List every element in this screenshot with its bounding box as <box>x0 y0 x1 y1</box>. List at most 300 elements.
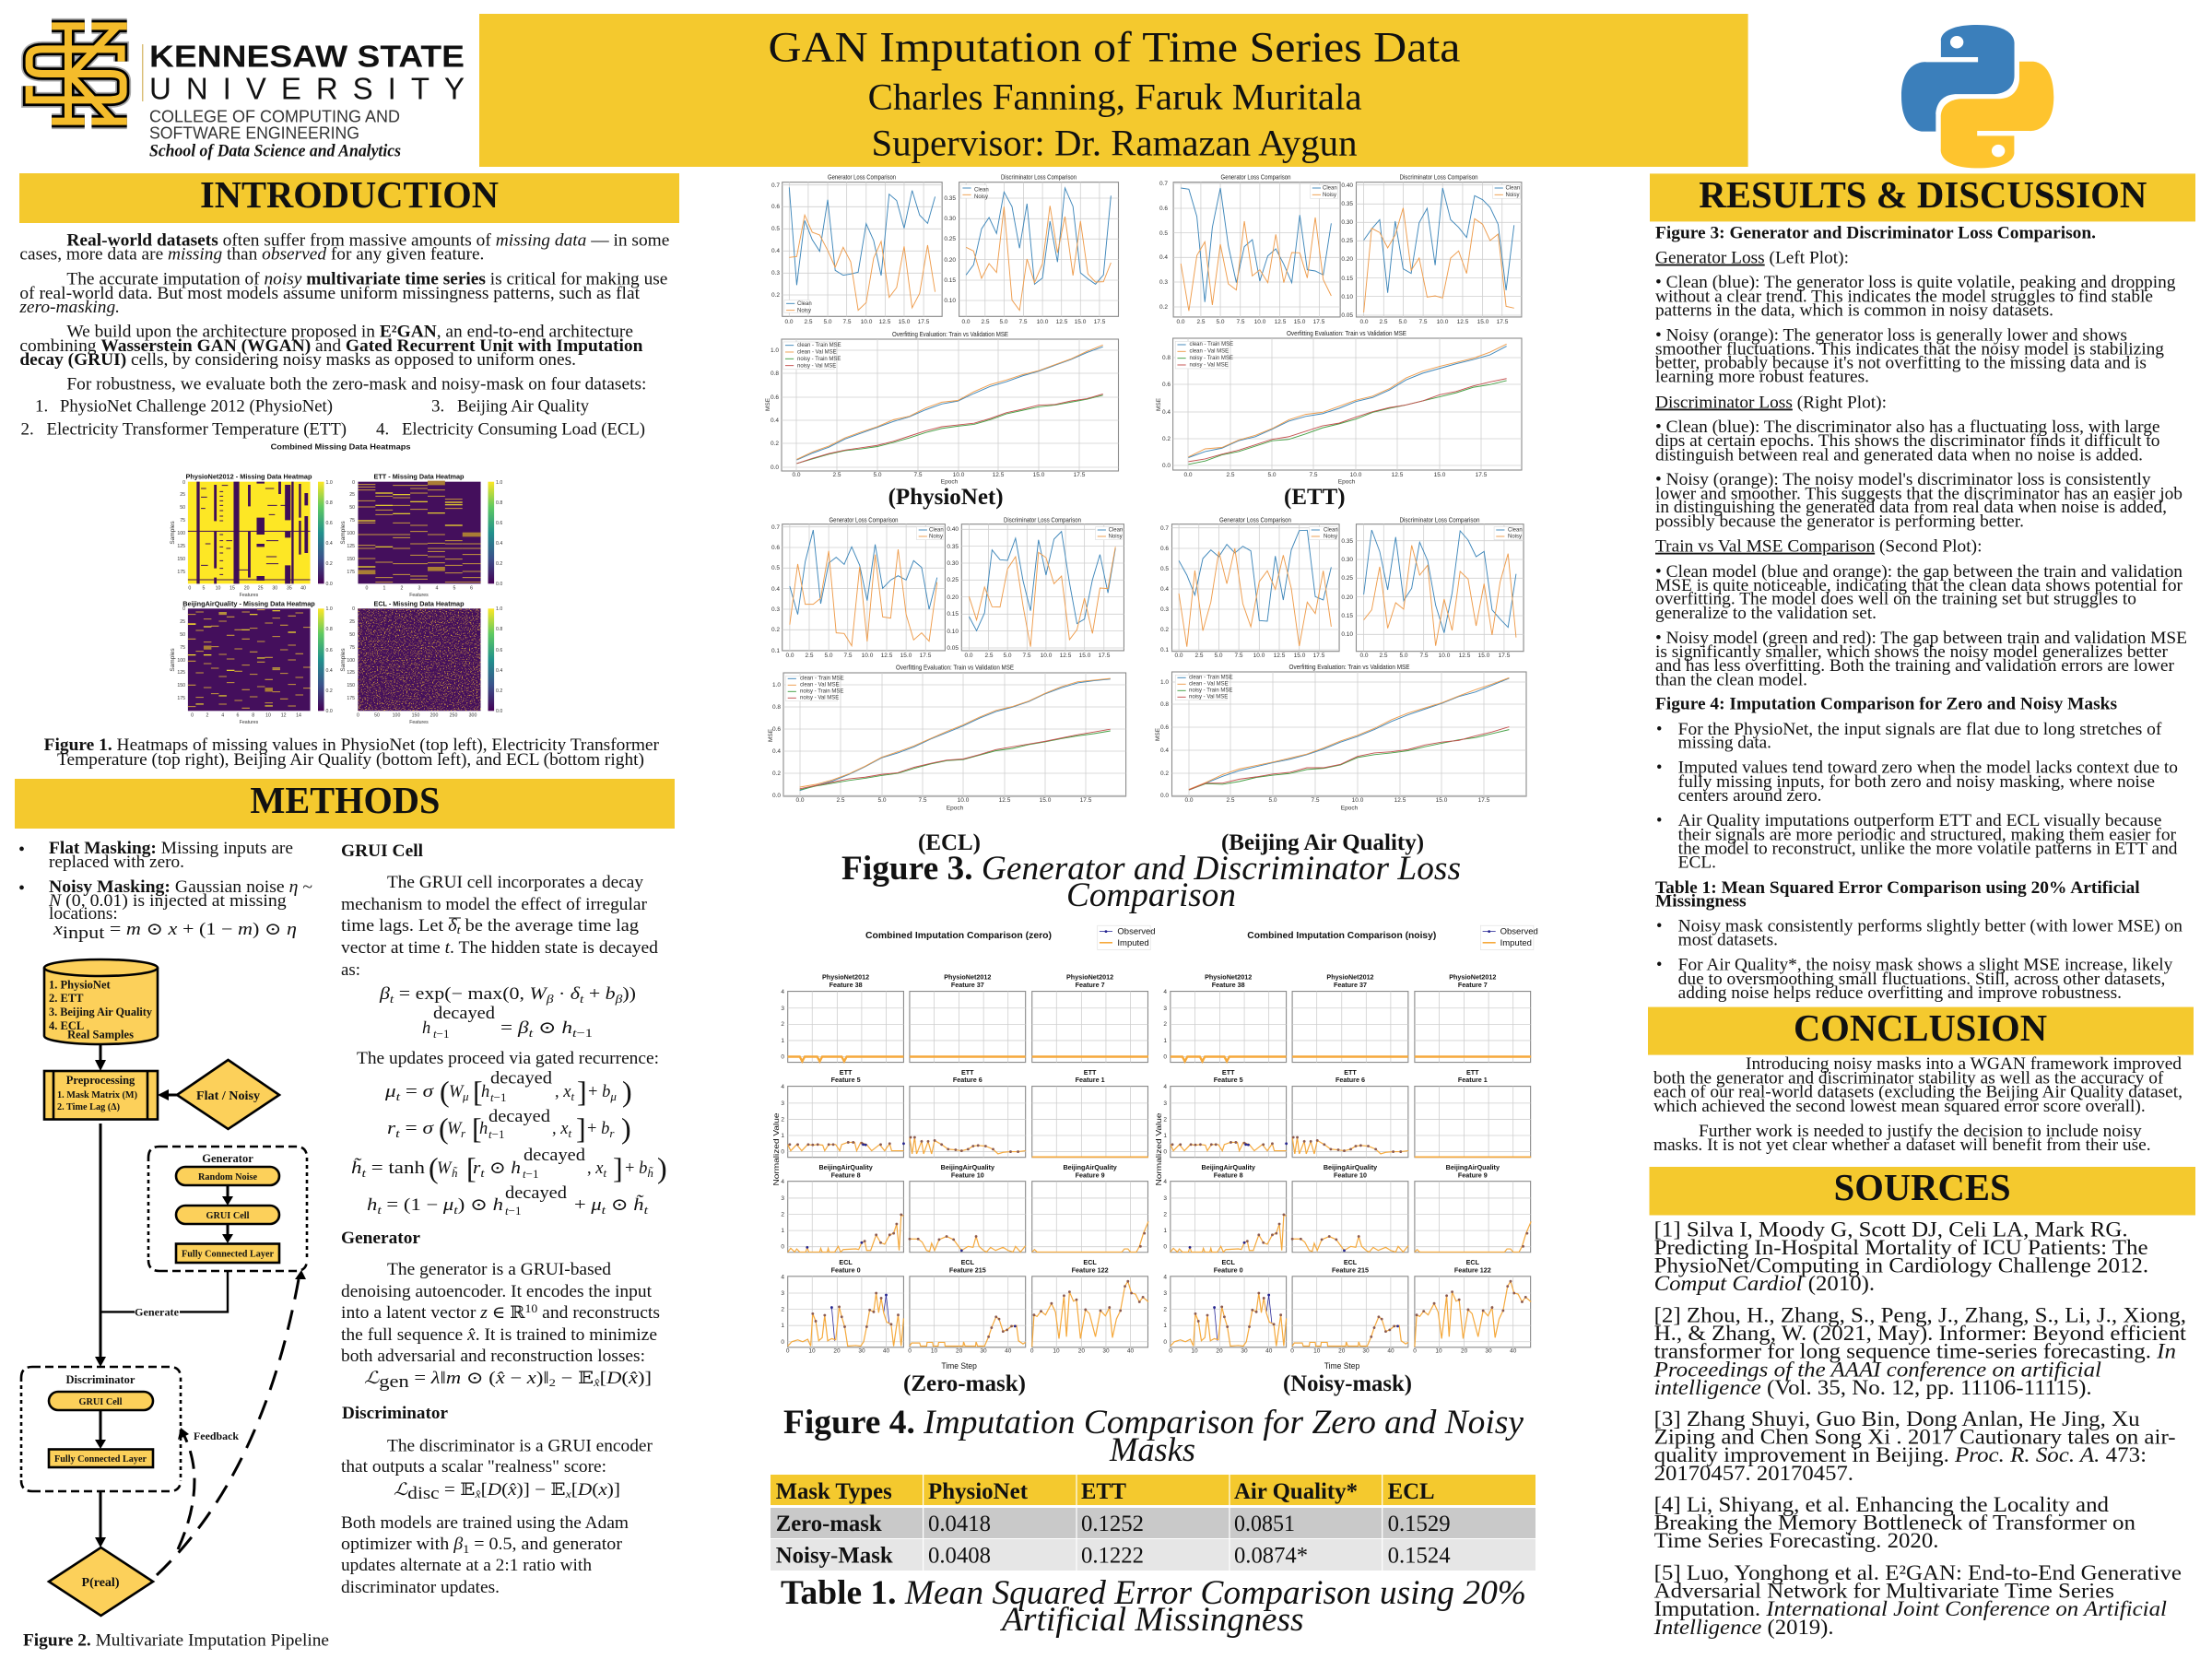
chart: Beijing discriminator loss: Discriminator Loss Comparison <box>1399 516 1480 524</box>
equation: update gate: decayed <box>490 1069 553 1088</box>
labels: noisy mask panel titles: ETT <box>1222 1068 1235 1077</box>
panel: discriminator: Fully Connected Layer <box>54 1453 147 1465</box>
chart: ETT overfitting evaluation: noisy - Train MSE <box>1189 356 1233 361</box>
labels: noisy mask panel titles: PhysioNet2012 <box>1326 973 1374 982</box>
text block: GRUI description: time lags. Let δ <box>341 917 456 935</box>
chart: PhysioNet overfitting evaluation: 1.0 <box>771 347 779 354</box>
chart: ECL overfitting evaluation: MSE <box>768 728 774 742</box>
equation: hidden state: t <box>644 1203 648 1217</box>
labels: heatmap axes and titles: 3 <box>418 585 421 591</box>
equation: hidden state: h <box>493 1196 503 1215</box>
chart: ECL overfitting evaluation: 0.0 <box>772 793 781 799</box>
chart: imputation comparison zero mask: 1 <box>781 1038 784 1044</box>
chart: ECL generator loss: 0.6 <box>771 545 780 551</box>
legend: colorbars: 1.0 <box>326 606 333 612</box>
chart: Beijing generator loss: Noisy <box>1324 534 1337 539</box>
chart: ECL generator loss: 0.7 <box>771 524 780 531</box>
chart: imputation comparison noisy mask: 4 <box>1163 1179 1167 1185</box>
text block: figure 4 discussion: Imputed values tend toward zero when the model lacks context due to <box>1678 759 2178 778</box>
chart: Beijing discriminator loss: 0.35 <box>1341 538 1353 545</box>
title banner: GAN Imputation of Time Series Data <box>769 24 1461 72</box>
equation: candidate state: h̃ <box>452 1166 458 1180</box>
chart: PhysioNet discriminator loss: 0.0 <box>961 319 971 325</box>
labels: heatmap axes and titles: 25 <box>180 492 185 498</box>
labels: heatmap axes and titles: 50 <box>349 632 355 638</box>
equation: candidate state: t <box>361 1166 366 1180</box>
text block: references: [2] Zhou, H., Zhang, S., Peng, J., Zhang, S., Li, J., Xiong, <box>1654 1304 2186 1328</box>
chart: PhysioNet discriminator loss: 0.15 <box>944 277 956 284</box>
chart: PhysioNet overfitting evaluation: 0.8 <box>771 371 779 377</box>
panel: generator: GRUI Cell <box>206 1210 249 1221</box>
equation: decay factor: = β <box>500 1019 526 1038</box>
label: ECL: (ECL) <box>918 830 981 855</box>
chart: Beijing generator loss: Generator Loss Comparison <box>1219 516 1291 524</box>
equation: discriminator loss: = 𝔼 <box>440 1481 475 1500</box>
chart: imputation comparison zero mask: 20 <box>956 1348 963 1355</box>
chart: ETT overfitting evaluation <box>1156 329 1522 485</box>
arrow: generate <box>101 1271 228 1318</box>
text block: masking strategies: Flat Masking: Missing inputs are <box>49 840 293 858</box>
text block: generator description: 10 <box>524 1301 537 1315</box>
equation: candidate state: ) <box>657 1151 667 1184</box>
chart group: ECL loss plots <box>768 516 1126 855</box>
chart: Beijing overfitting evaluation: 12.5 <box>1394 797 1406 804</box>
panel: GRUI cell text <box>341 842 667 1597</box>
chart: ECL generator loss: 2.5 <box>805 653 814 659</box>
heading: conclusion: CONCLUSION <box>1794 1006 2047 1049</box>
chart: imputation comparison noisy mask: 3 <box>1163 1006 1167 1012</box>
labels: zero mask panel titles: ETT <box>961 1068 974 1077</box>
text block: introduction paragraphs: 2. <box>20 420 34 440</box>
text block: generator description: the full sequence x̂. It is trained to minimize <box>341 1326 657 1345</box>
text block: references: Proceedings of the AAAI conference on artificial <box>1653 1359 2101 1382</box>
labels: heatmap axes and titles: 5 <box>453 585 456 591</box>
equation: reset gate: r <box>609 1126 615 1140</box>
labels: heatmap axes and titles: 15 <box>229 585 235 591</box>
chart: imputation comparison noisy mask: Time Step <box>1324 1361 1359 1371</box>
text block: references: Comput Cardiol (2010). <box>1654 1272 1875 1296</box>
chart: PhysioNet overfitting evaluation <box>765 330 1119 485</box>
logo: Kennesaw State University: KENNESAW STATE <box>149 40 465 74</box>
chart: PhysioNet overfitting evaluation: Epoch <box>941 479 959 485</box>
equation: candidate state: W <box>437 1159 453 1178</box>
chart: imputation comparison zero mask: 4 <box>781 1274 784 1281</box>
text block: table 1 discussion: Table 1: Mean Squared Error Comparison using 20% Artificial <box>1655 879 2140 898</box>
chart: Beijing overfitting evaluation: 5.0 <box>1268 797 1277 804</box>
node: real samples cylinder <box>44 959 158 1044</box>
labels: heatmap axes and titles: 4 <box>436 585 439 591</box>
caption: figure 3: Figure 3. Generator and Discriminator Loss <box>841 850 1461 888</box>
text block: training notes: discriminator updates. <box>341 1579 500 1597</box>
legend: colorbars: 0.0 <box>496 709 502 714</box>
equation: update gate: + b <box>588 1083 610 1101</box>
chart: Beijing overfitting evaluation: 0.4 <box>1160 747 1169 754</box>
legend: colorbars: 1.0 <box>496 480 502 486</box>
text block: references: intelligence (Vol. 35, No. 12, pp. 11106-11115). <box>1654 1376 2092 1400</box>
chart: imputation comparison zero mask: 3 <box>781 1100 784 1107</box>
chart: imputation comparison noisy mask: 1 <box>1163 1228 1167 1234</box>
chart: Beijing overfitting evaluation: 15.0 <box>1436 797 1448 804</box>
text block: GRUI description: t <box>457 923 461 936</box>
chart: imputation comparison noisy mask: 0 <box>1169 1348 1172 1355</box>
labels: heatmap axes and titles: 0 <box>352 480 355 486</box>
labels: noisy mask panel titles: Feature 10 <box>1334 1171 1367 1179</box>
chart: PhysioNet overfitting evaluation: 0.0 <box>792 472 801 478</box>
text block: introduction paragraphs: We build upon the architecture proposed in E²GAN, an end-to-end architecture <box>66 323 633 342</box>
arrow: discriminator to output <box>95 1491 106 1547</box>
panel: generator: Fully Connected Layer <box>182 1248 274 1259</box>
arrow: generate: Generate <box>135 1305 180 1318</box>
heading: introduction: INTRODUCTION <box>200 173 499 216</box>
table: mean squared error comparison: 0.0408 <box>928 1544 991 1569</box>
chart: ETT overfitting evaluation: 10.0 <box>1350 472 1362 478</box>
chart: PhysioNet discriminator loss: Discriminator Loss Comparison <box>1001 173 1077 182</box>
chart: imputation comparison zero mask: 0 <box>1030 1348 1034 1355</box>
chart: PhysioNet overfitting evaluation: 2.5 <box>832 472 841 478</box>
heading: generator: Generator <box>341 1230 420 1248</box>
chart: imputation comparison zero mask: 3 <box>781 1195 784 1202</box>
chart: ECL discriminator loss: 7.5 <box>1022 653 1031 659</box>
chart: PhysioNet overfitting evaluation: clean - Train MSE <box>797 343 841 348</box>
node: flat or noisy decision: Flat / Noisy <box>196 1088 260 1102</box>
chart: ETT overfitting evaluation: 7.5 <box>1309 472 1318 478</box>
chart: ETT generator loss: 0.4 <box>1159 254 1168 261</box>
equation: hidden state: + μ <box>574 1196 600 1215</box>
labels: heatmap axes and titles: 200 <box>430 712 438 718</box>
panel: conclusion <box>1648 1006 2194 1155</box>
chart: PhysioNet discriminator loss: 0.30 <box>944 216 956 222</box>
equation: update gate: = <box>400 1083 423 1101</box>
text block: figure 4 discussion: their signals are more periodic and structured, making them easier for <box>1678 826 2176 844</box>
chart: PhysioNet discriminator loss: 12.5 <box>1056 319 1068 325</box>
chart: imputation comparison zero mask: 20 <box>1078 1348 1085 1355</box>
table: mean squared error comparison: ECL <box>1388 1479 1435 1504</box>
equation: hidden state: μ <box>442 1196 453 1215</box>
chart: imputation comparison noisy mask: 0 <box>1163 1244 1167 1251</box>
legend: colorbars: 0.6 <box>326 521 333 526</box>
equation: discriminator loss: [ <box>481 1481 488 1500</box>
chart: ECL overfitting evaluation: noisy - Val MSE <box>800 696 839 701</box>
text block: introduction paragraphs: For robustness, we evaluate both the zero-mask and noisy-mask on four datasets: <box>66 375 646 394</box>
labels: zero mask panel titles: PhysioNet2012 <box>944 973 991 982</box>
chart: Beijing generator loss: 7.5 <box>1234 653 1243 659</box>
text block: figure 3 discussion: • Clean (blue): The discriminator also has a fluctuating loss, with large <box>1655 418 2160 437</box>
equation: decay factor: t <box>580 992 584 1006</box>
chart: imputation comparison noisy mask: 2 <box>1163 1021 1167 1028</box>
chart: ETT overfitting evaluation: 0.8 <box>1162 355 1171 361</box>
chart: imputation comparison zero mask: 10 <box>808 1348 816 1355</box>
equation: reset gate: t <box>395 1126 400 1140</box>
chart: PhysioNet discriminator loss: 0.20 <box>944 257 956 264</box>
text block: figure 3 discussion: learning more robust features. <box>1655 369 1869 387</box>
equation: reset gate: ) <box>621 1112 631 1145</box>
chart: ECL overfitting evaluation <box>768 664 1126 811</box>
equation: discriminator loss: ℒ <box>394 1481 408 1500</box>
labels: heatmap axes and titles: 100 <box>347 658 355 664</box>
chart: ECL discriminator loss: 0.05 <box>947 645 959 652</box>
chart: PhysioNet generator loss: 15.0 <box>899 319 911 325</box>
equation: candidate state: t <box>603 1166 606 1180</box>
chart: Beijing generator loss: 0.1 <box>1160 647 1169 653</box>
labels: heatmap axes and titles: Features <box>409 720 429 725</box>
text block: GRUI description: mechanism to model the effect of irregular <box>341 896 647 914</box>
text block: figure 3 discussion: dips at certain epochs. This shows the discriminator finds it difficult to <box>1655 432 2160 451</box>
chart: ETT overfitting evaluation: 5.0 <box>1267 472 1277 478</box>
text block: GRUI description: vector at time t. The hidden state is decayed <box>341 939 659 958</box>
chart: imputation comparison noisy mask: 40 <box>1265 1348 1273 1355</box>
chart: ECL discriminator loss: 17.5 <box>1099 653 1111 659</box>
labels: heatmap axes and titles: 4 <box>221 712 224 718</box>
equation: decay factor <box>379 985 636 1041</box>
equation: reset gate: decayed <box>488 1108 551 1126</box>
logo: Kennesaw State University: School of Data Science and Analytics <box>149 141 401 160</box>
equation: update gate: μ <box>384 1083 396 1101</box>
caption: table 1: Table 1. Mean Squared Error Comparison using 20% <box>781 1574 1526 1612</box>
chart: ECL generator loss: 5.0 <box>824 653 833 659</box>
legend: colorbars: 0.0 <box>326 709 333 714</box>
equation: generator loss: D(x̂)] <box>606 1370 649 1388</box>
chart: ECL generator loss: Noisy <box>929 534 943 539</box>
text block: GRUI description: be the average time lag <box>461 917 639 935</box>
icon: KS emblem <box>29 23 127 122</box>
labels: heatmap axes and titles: 10 <box>265 712 271 718</box>
labels: heatmap axes and titles: 75 <box>180 518 185 524</box>
chart: PhysioNet overfitting evaluation: noisy - Train MSE <box>797 357 841 362</box>
text block: figure 3 discussion: • Noisy (orange): The generator loss is generally lower and shows <box>1655 326 2127 345</box>
node: real samples cylinder: 1. PhysioNet <box>49 979 111 992</box>
labels: zero mask panel titles: ETT <box>1084 1068 1097 1077</box>
text block: introduction paragraphs: Electricity Transformer Temperature (ETT) <box>46 420 347 440</box>
labels: heatmap axes and titles: ECL - Missing Data Heatmap <box>374 599 465 607</box>
chart: Beijing generator loss: 0.4 <box>1160 586 1169 593</box>
chart: imputation comparison noisy mask: 4 <box>1163 989 1167 995</box>
text block: figure 4 discussion: For the PhysioNet, the input signals are flat due to long stretches of <box>1678 721 2162 739</box>
text block: references: Predicting In-Hospital Mortality of ICU Patients: The <box>1654 1236 2148 1260</box>
text block: figure 3 discussion: Discriminator Loss (Right Plot): <box>1655 394 1887 413</box>
equation: candidate state: h̃ <box>351 1158 362 1178</box>
chart: ECL overfitting evaluation: Overfitting Evaluation: Train vs Validation MSE <box>896 664 1014 671</box>
labels: heatmap axes and titles: 0 <box>366 585 369 591</box>
text block: training notes <box>341 1514 629 1597</box>
equation: hidden state: h <box>367 1196 377 1215</box>
labels: zero mask panel titles: Feature 215 <box>949 1265 986 1274</box>
labels: noisy mask panel titles <box>1202 973 1500 1274</box>
label: PhysioNet: (PhysioNet) <box>888 485 1004 510</box>
chart: ECL discriminator loss: 0.20 <box>947 594 959 601</box>
chart: PhysioNet generator loss: 0.3 <box>771 270 780 276</box>
text block: figure 3 discussion: generalize to the validation set. <box>1655 605 1877 623</box>
chart: ECL discriminator loss: 0.10 <box>947 629 959 635</box>
chart: ECL generator loss: 15.0 <box>900 653 912 659</box>
node: real samples cylinder: 3. Beijing Air Quality <box>49 1006 153 1018</box>
equation: generator loss: λ‖m ⊙ ( x̂ − x)‖ <box>431 1370 547 1388</box>
labels: heatmap axes and titles: 100 <box>393 712 400 718</box>
chart: PhysioNet discriminator loss: Clean <box>974 188 989 194</box>
chart: ETT overfitting evaluation: 15.0 <box>1434 472 1446 478</box>
equation: reset gate: h <box>479 1120 488 1138</box>
labels: heatmap axes and titles: PhysioNet2012 - Missing Data Heatmap <box>186 472 312 480</box>
table: mean squared error comparison: 0.1524 <box>1388 1544 1451 1569</box>
labels: heatmap axes and titles: Samples <box>170 648 176 672</box>
labels: heatmap axes and titles: 35 <box>287 585 292 591</box>
chart: PhysioNet overfitting evaluation: 12.5 <box>993 472 1005 478</box>
node: real samples cylinder: 2. ETT <box>49 992 84 1005</box>
chart: Beijing generator loss: 0.6 <box>1160 546 1169 552</box>
text block: references: Breaking the Memory Bottleneck of Transformer on <box>1654 1512 2136 1535</box>
chart: imputation comparison zero mask: Observed <box>1117 927 1156 937</box>
chart: Beijing discriminator loss: Clean <box>1508 527 1523 533</box>
equation: reset gate: W <box>447 1120 463 1138</box>
equation: reset gate: , x <box>552 1120 568 1138</box>
chart: ETT overfitting evaluation: Overfitting Evaluation: Train vs Validation MSE <box>1287 329 1406 337</box>
arrow: main flow to discriminator <box>95 1124 106 1367</box>
chart: ETT overfitting evaluation: MSE <box>1156 397 1162 411</box>
label: zero mask: (Zero-mask) <box>903 1371 1026 1396</box>
node: real samples cylinder: Real Samples <box>67 1029 134 1041</box>
chart: Beijing overfitting evaluation: 0.0 <box>1184 797 1194 804</box>
chart: PhysioNet discriminator loss: 17.5 <box>1094 319 1106 325</box>
arrow: feedback to discriminator <box>178 1428 194 1549</box>
chart: ECL discriminator loss: Noisy <box>1109 534 1123 539</box>
chart: ECL generator loss: 12.5 <box>881 653 893 659</box>
chart: Beijing discriminator loss: 0.30 <box>1341 557 1353 563</box>
chart: ECL overfitting evaluation: 0.4 <box>772 748 781 755</box>
chart: Beijing overfitting evaluation: 1.0 <box>1160 679 1169 686</box>
chart: imputation comparison zero mask: 0 <box>781 1244 784 1251</box>
equation: decay factor: ⊙ <box>533 1019 561 1038</box>
chart: ECL discriminator loss: 0.35 <box>947 544 959 550</box>
chart: ECL overfitting evaluation: 0.6 <box>772 726 781 733</box>
chart: ETT discriminator loss: 12.5 <box>1457 319 1469 325</box>
labels: heatmap axes and titles: 50 <box>349 505 355 511</box>
chart: Beijing generator loss: 0.3 <box>1160 606 1169 613</box>
equation: update gate: σ <box>423 1083 434 1101</box>
chart group: Beijing Air Quality loss plots <box>1155 516 1526 855</box>
chart: PhysioNet overfitting evaluation: 0.2 <box>771 441 779 447</box>
text block: figure 3 discussion: Figure 3: Generator and Discriminator Loss Comparison. <box>1655 225 2096 243</box>
equation: update gate: μ <box>609 1089 617 1103</box>
equation: hidden state: t <box>377 1203 382 1217</box>
logo: Kennesaw State University <box>29 23 465 160</box>
equation: generator loss: x̂ <box>593 1376 600 1389</box>
labels: heatmap axes and titles: Samples <box>170 521 176 545</box>
text block: figure 3 discussion: • Noisy (orange): The noisy model's discriminator loss is consistently <box>1655 471 2151 489</box>
labels: noisy mask panel titles: BeijingAirQuality <box>1446 1163 1500 1171</box>
labels: heatmap axes and titles: 6 <box>237 712 240 718</box>
chart: imputation comparison zero mask: 2 <box>781 1021 784 1028</box>
chart: ETT generator loss: 0.2 <box>1159 304 1168 311</box>
chart: imputation comparison zero mask: 0 <box>786 1348 790 1355</box>
chart: ETT overfitting evaluation: 0.4 <box>1162 409 1171 416</box>
table: mean squared error comparison: PhysioNet <box>928 1479 1029 1504</box>
text block: figure 3 discussion: possibly because the generator is performing better. <box>1655 512 2024 531</box>
chart: ECL overfitting evaluation: 0.8 <box>772 704 781 711</box>
labels: heatmap axes and titles: 125 <box>347 544 355 549</box>
text block: figure 3 discussion: without a clear trend. This indicates the model struggles to find stable <box>1655 288 2153 306</box>
labels: heatmap axes and titles: 14 <box>296 712 301 718</box>
labels: zero mask panel titles: PhysioNet2012 <box>822 973 869 982</box>
text block: conclusion: Introducing noisy masks into a WGAN framework improved <box>1746 1055 2183 1074</box>
equation: decay factor: t−1 <box>433 1027 449 1041</box>
chart: Beijing discriminator loss: 15.0 <box>1478 653 1490 659</box>
chart: Beijing overfitting evaluation: 0.0 <box>1160 793 1169 799</box>
labels: heatmap axes and titles <box>170 472 477 725</box>
legend: colorbars: 0.0 <box>496 582 502 587</box>
equation: generator loss: [ <box>600 1370 606 1388</box>
chart: imputation comparison zero mask: Imputed <box>1117 938 1149 948</box>
text block: masking strategies: replaced with zero. <box>49 853 184 872</box>
caption: figure 2: Figure 2. Multivariate Imputation Pipeline <box>23 1631 329 1650</box>
text block: introduction paragraphs: Beijing Air Quality <box>457 397 589 417</box>
text block: introduction paragraphs: 1. <box>35 397 48 417</box>
chart: ETT discriminator loss: 2.5 <box>1379 319 1388 325</box>
equation: generator loss: gen <box>379 1373 409 1392</box>
chart: ETT generator loss: 12.5 <box>1275 319 1287 325</box>
node: preprocessing: 2. Time Lag (Δ) <box>57 1101 120 1112</box>
labels: zero mask panel titles <box>818 973 1117 1274</box>
chart: imputation comparison noisy mask: 10 <box>1435 1348 1442 1355</box>
legend: colorbars: 0.8 <box>496 500 502 506</box>
label: ETT: (ETT) <box>1284 485 1346 510</box>
chart: ETT discriminator loss: 0.0 <box>1359 319 1369 325</box>
chart group: ETT loss plots <box>1156 173 1522 510</box>
text block: GRUI description: The GRUI cell incorporates a decay <box>387 874 644 892</box>
chart: imputation comparison noisy mask: Combined Imputation Comparison (noisy) <box>1247 931 1436 941</box>
chart: imputation comparison zero mask: 2 <box>781 1307 784 1313</box>
text block: introduction paragraphs: Electricity Consuming Load (ECL) <box>402 420 645 440</box>
chart: PhysioNet discriminator loss: 10.0 <box>1037 319 1049 325</box>
chart: Beijing generator loss: 0.5 <box>1160 566 1169 572</box>
equation: decay factor: = exp(− max(0, <box>394 985 530 1004</box>
text block: figure 4 discussion: Figure 4: Imputation Comparison for Zero and Noisy Masks <box>1655 695 2117 713</box>
heading: conclusion <box>1648 1006 2194 1055</box>
chart: ECL discriminator loss: 0.25 <box>947 577 959 583</box>
equation: candidate state: ( <box>429 1151 439 1184</box>
equation: candidate state: ⊙ <box>485 1159 511 1178</box>
logo: Kennesaw State University: UNIVERSITY <box>149 72 465 106</box>
labels: zero mask panel titles: Feature 122 <box>1072 1265 1109 1274</box>
chart group: PhysioNet loss plots <box>765 173 1119 510</box>
chart: PhysioNet discriminator loss <box>944 173 1118 325</box>
labels: noisy mask panel titles: Feature 0 <box>1214 1265 1243 1274</box>
chart: imputation comparison noisy mask: 4 <box>1163 1084 1167 1090</box>
chart: ETT overfitting evaluation: 0.0 <box>1183 472 1193 478</box>
chart: Beijing discriminator loss <box>1341 516 1524 659</box>
chart: imputation comparison noisy mask: 3 <box>1163 1290 1167 1297</box>
text block: masking strategies: = <box>104 921 126 939</box>
chart: Beijing discriminator loss: Noisy <box>1508 534 1522 539</box>
chart: ECL generator loss: 0.2 <box>771 627 780 633</box>
chart: ECL generator loss: Generator Loss Comparison <box>830 516 898 524</box>
chart: imputation comparison noisy mask: Observed <box>1500 927 1538 937</box>
chart: ETT discriminator loss: 0.35 <box>1341 201 1353 207</box>
chart: Beijing overfitting evaluation: Overfitting Evaluation: Train vs Validation MSE <box>1288 663 1410 671</box>
heatmap: PhysioNet <box>188 482 311 583</box>
legend: colorbars: 0.4 <box>326 541 333 547</box>
equation: decay factor: β <box>546 992 554 1006</box>
chart: imputation comparison zero mask: 4 <box>781 1084 784 1090</box>
chart: Beijing discriminator loss: 0.10 <box>1341 631 1353 638</box>
panel: generator: Random Noise <box>198 1171 257 1182</box>
equation: update gate: t <box>571 1089 574 1103</box>
text block: updates intro: The updates proceed via gated recurrence: <box>357 1050 659 1068</box>
caption: figure 1: Figure 1. Heatmaps of missing values in PhysioNet (top left), Electricity Transformer <box>44 735 660 755</box>
chart: imputation comparison zero mask: 30 <box>980 1348 987 1355</box>
chart: ECL overfitting evaluation: clean - Val MSE <box>800 683 840 688</box>
heading: sources: SOURCES <box>1834 1166 2011 1208</box>
node: preprocessing: 1. Mask Matrix (M) <box>57 1089 137 1100</box>
caption: figure 1 <box>44 735 660 770</box>
